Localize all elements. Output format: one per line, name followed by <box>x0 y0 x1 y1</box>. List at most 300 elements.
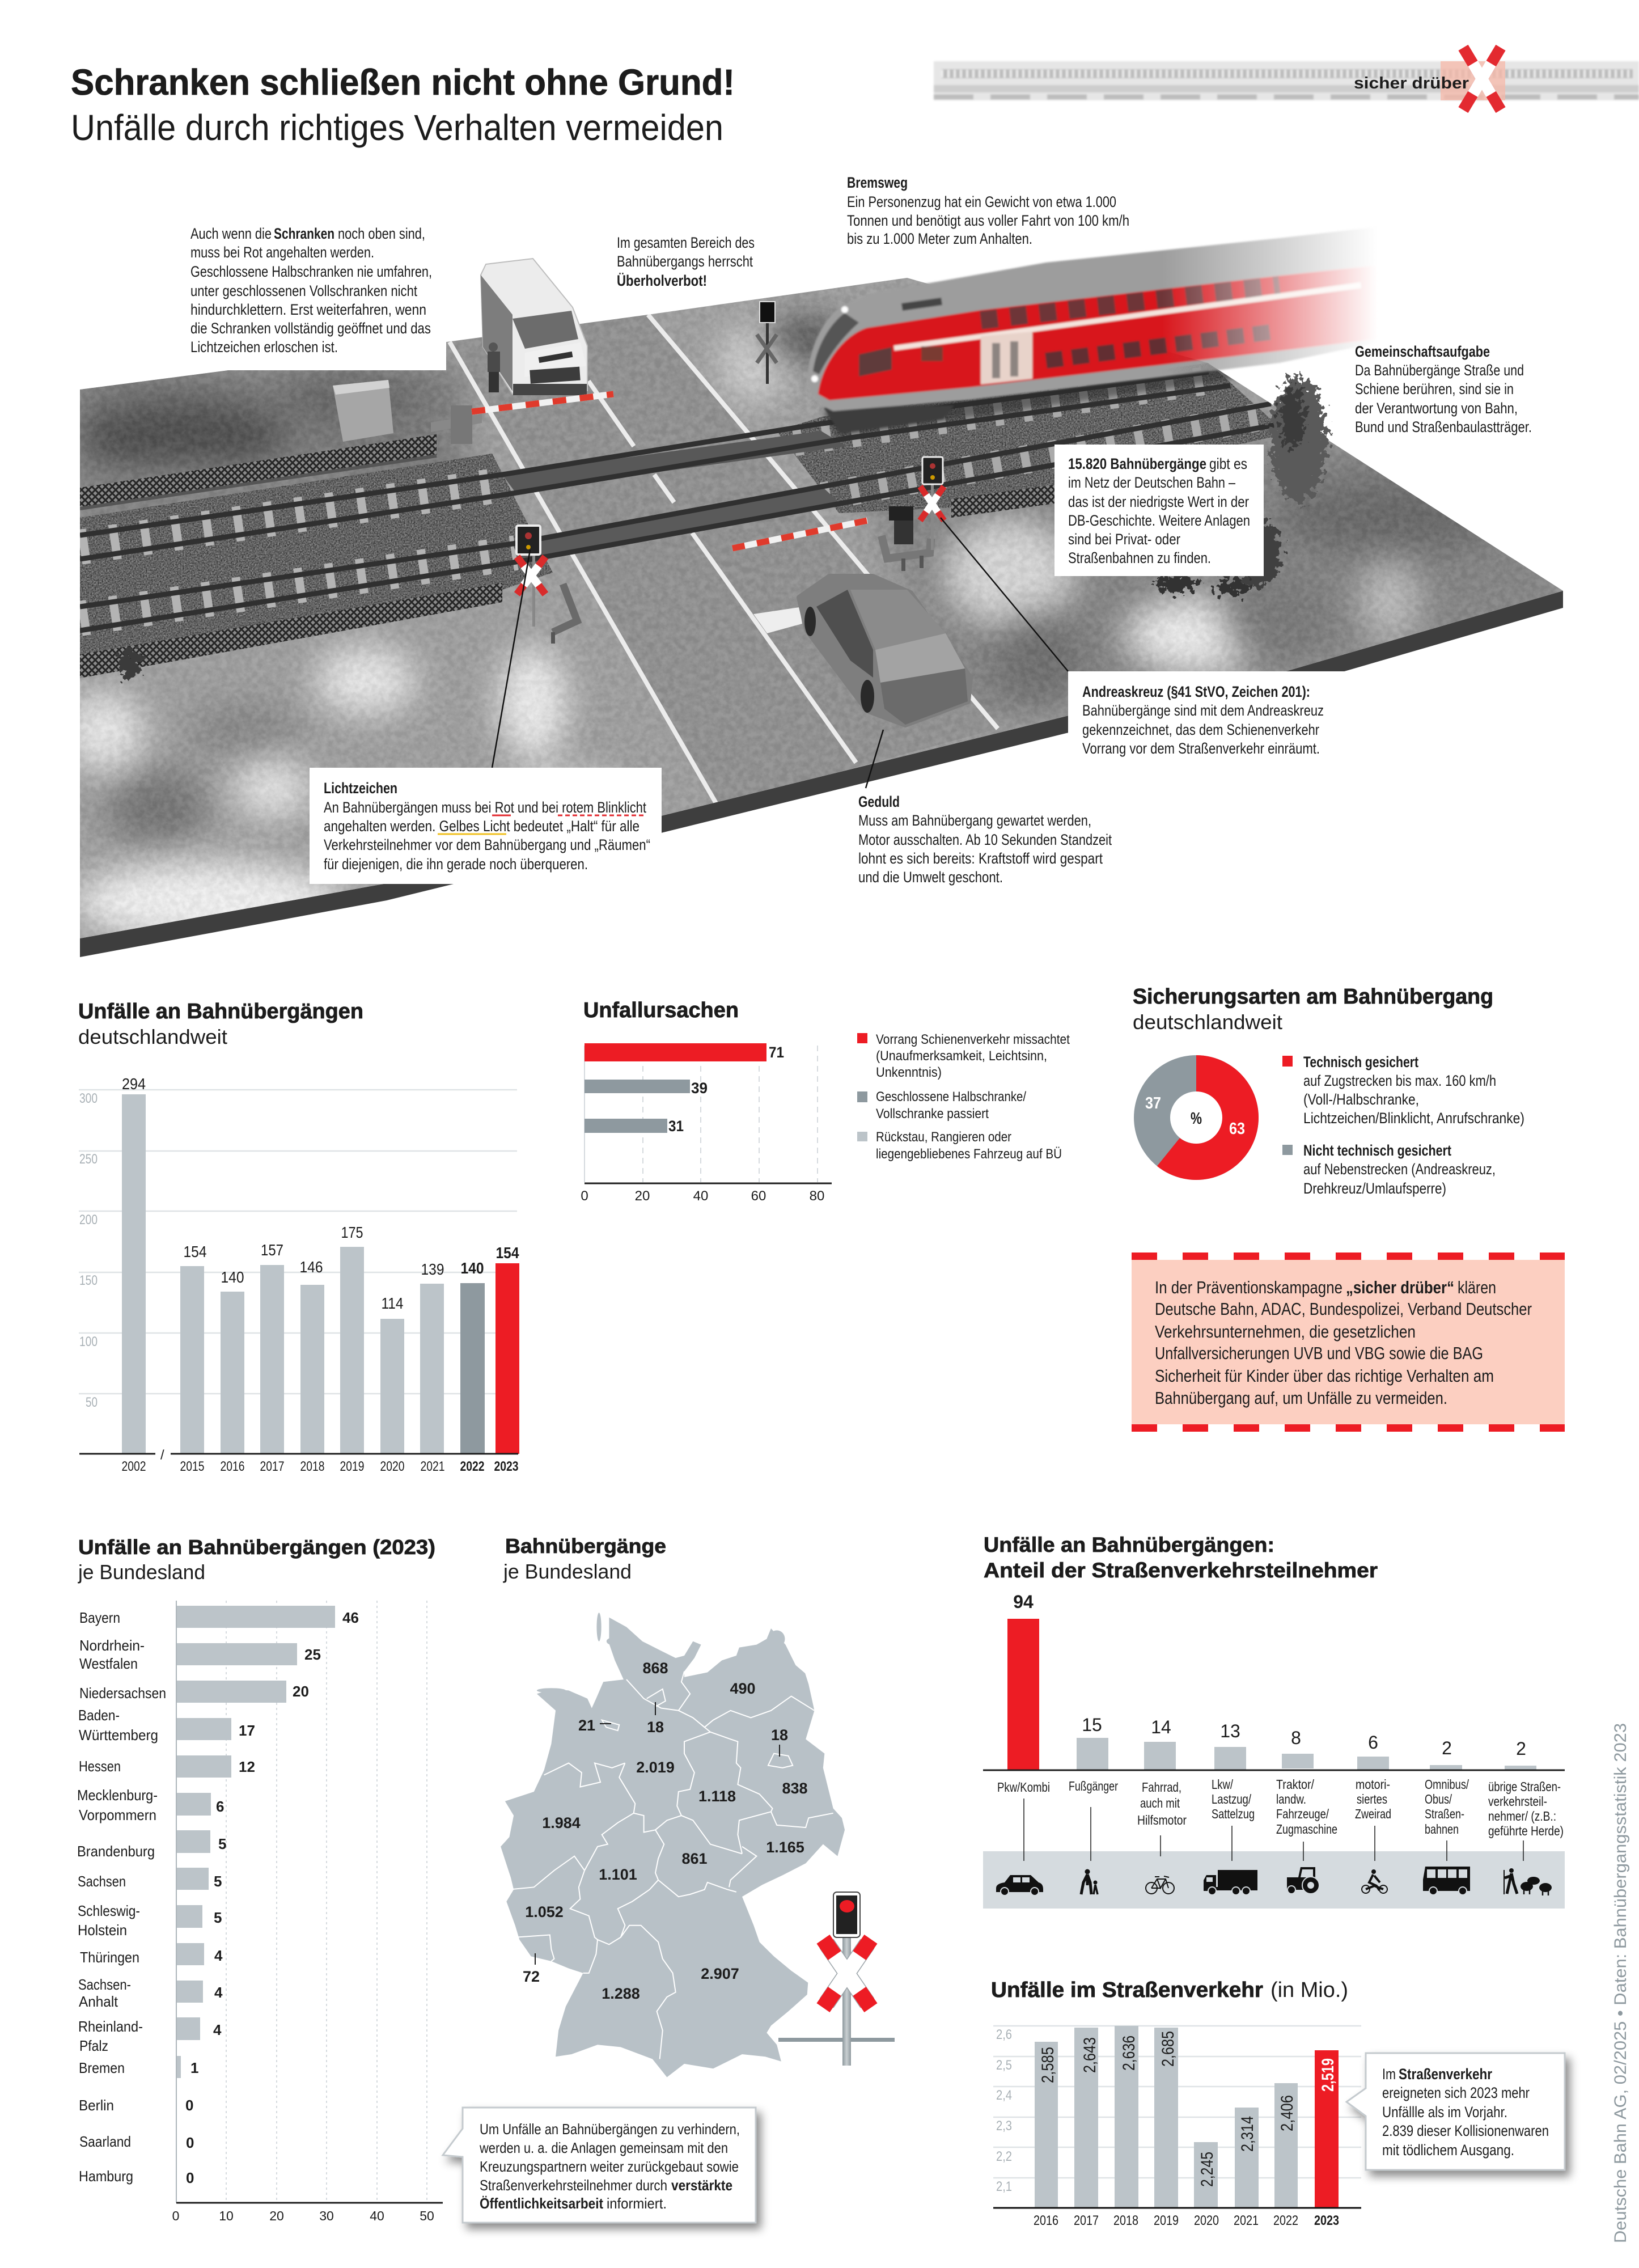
callout: Öffentlichkeitsarbeit: Straßenverkehrsteilnehmer durch <box>480 2177 667 2194</box>
legend: liegengebliebenes Fahrzeug auf BÜ <box>876 1146 1062 1162</box>
rotated bar values: 2,636 <box>1120 2036 1138 2071</box>
callout: Straßenverkehr: mit tödlichem Ausgang. <box>1382 2142 1514 2159</box>
scene side wall <box>80 591 1563 957</box>
x axis labels: 0 <box>172 2208 179 2223</box>
x axis years: 2020 <box>380 1459 405 1474</box>
state labels: Westfalen <box>79 1655 138 1672</box>
heading: Unfälle an Bahnübergängen <box>78 1000 363 1023</box>
callout: 15.820 Bahnübergänge: Straßenbahnen zu finden. <box>1068 549 1211 566</box>
state labels: Hessen <box>79 1758 121 1775</box>
x axis labels: 50 <box>420 2208 434 2223</box>
callout: 15.820 Bahnübergänge: das ist der niedrigste Wert in der <box>1068 493 1249 510</box>
text: Geduld: Muss am Bahnübergang gewartet werden, <box>858 812 1091 829</box>
x axis labels: 80 <box>810 1188 824 1204</box>
crossing pads <box>502 431 846 492</box>
callout: Andreaskreuz: Vorrang vor dem Straßenverkehr einräumt. <box>1082 740 1320 757</box>
x axis years: 2002 <box>121 1459 146 1474</box>
map values: 838 <box>782 1780 808 1797</box>
x axis years: 2015 <box>180 1459 204 1474</box>
text: Überholverbot: Bahnübergangs herrscht <box>617 253 753 270</box>
category labels: landw. <box>1276 1792 1306 1806</box>
icon: bicycle <box>1146 1876 1174 1894</box>
chart: Anteil der Straßenverkehrsteilnehmer <box>983 1533 1565 1909</box>
legend: Technisch gesichert <box>1303 1053 1418 1070</box>
category labels: Lkw/ <box>1212 1777 1233 1792</box>
map values: 1.118 <box>698 1788 736 1805</box>
subheading: je Bundesland <box>78 1560 205 1584</box>
bar values <box>1013 1592 1526 1759</box>
heading: Sicherungsarten am Bahnübergang <box>1133 985 1493 1009</box>
text: Schranken: Geschlossene Halbschranken nie umfahren, <box>190 263 432 280</box>
scene: 3D railway crossing <box>65 222 1570 957</box>
chart: Bahnübergänge je Bundesland map <box>501 1534 845 2077</box>
y axis labels: 100 <box>79 1334 98 1349</box>
van <box>481 259 587 395</box>
text: Gemeinschaftsaufgabe: der Verantwortung von Bahn, <box>1355 400 1518 417</box>
x axis years: 2017 <box>1074 2213 1099 2228</box>
callout: Lichtzeichen: Verkehrsteilnehmer vor dem Bahnübergang und „Räumen“ <box>324 836 650 853</box>
category labels: übrige Straßen- <box>1488 1779 1561 1794</box>
x axis labels: 60 <box>751 1188 766 1204</box>
state labels: Hamburg <box>79 2168 133 2185</box>
state labels: Vorpommern <box>79 1806 156 1823</box>
category labels: nehmer/ (z.B.: <box>1488 1809 1556 1823</box>
y axis labels: 2,1 <box>996 2179 1012 2194</box>
title: Schranken schließen nicht ohne Grund! <box>71 62 735 103</box>
icon: tractor <box>1287 1867 1319 1894</box>
bar values: 146 <box>299 1258 323 1276</box>
bar values: 94 <box>1013 1592 1034 1612</box>
callout: Öffentlichkeitsarbeit: werden u. a. die Anlagen gemeinsam mit den <box>479 2139 728 2156</box>
y axis labels: 300 <box>79 1091 98 1106</box>
callout: Öffentlichkeitsarbeit: Kreuzungspartnern weiter zurückgebaut sowie <box>480 2158 739 2175</box>
bars <box>1007 1619 1536 1770</box>
x axis years: 2023 <box>1314 2213 1339 2228</box>
bar values: 8 <box>1291 1728 1301 1748</box>
category labels: geführte Herde) <box>1488 1823 1564 1838</box>
bar values: 20 <box>293 1683 309 1700</box>
bar values: 12 <box>239 1758 255 1775</box>
y axis labels: 2,6 <box>996 2027 1012 2042</box>
logo: sicher drüber: sicher drüber <box>1354 74 1469 92</box>
front left strip shadow <box>80 456 437 509</box>
text: Geduld: und die Umwelt geschont. <box>858 869 1003 886</box>
signal left with St Andrew's cross <box>516 526 577 644</box>
category labels: Zugmaschine <box>1276 1822 1337 1837</box>
callout: Straßenverkehr: 2.839 dieser Kollisionenwaren <box>1382 2122 1549 2139</box>
map values: 1.165 <box>766 1839 804 1856</box>
x axis labels: 40 <box>370 2208 384 2223</box>
category labels: Sattelzug <box>1212 1806 1255 1821</box>
road surface <box>450 315 998 805</box>
bar values: 154 <box>184 1243 206 1260</box>
heading: Unfälle an Bahnübergängen: <box>984 1533 1274 1556</box>
icon: pedestrian <box>1081 1869 1098 1894</box>
bar values: 1 <box>190 2059 198 2076</box>
category labels: motori- <box>1356 1777 1390 1792</box>
panel: campaign box: Deutsche Bahn, ADAC, Bundespolizei, Verband Deutscher <box>1155 1299 1532 1319</box>
leader line: Geduld <box>866 730 883 788</box>
signal right with St Andrew's cross <box>920 457 944 550</box>
panel: campaign box: Verkehrsunternehmen, die gesetzlichen <box>1155 1322 1416 1342</box>
y axis labels <box>996 2027 1012 2194</box>
category labels: auch mit <box>1140 1796 1180 1810</box>
icon: truck <box>1204 1870 1257 1895</box>
ground, road and tracks <box>65 272 1570 953</box>
category labels: Traktor/ <box>1276 1777 1315 1792</box>
x axis years: 2018 <box>1113 2213 1138 2228</box>
state labels: Rheinland- <box>78 2018 143 2035</box>
category labels: Pkw/Kombi <box>997 1780 1050 1795</box>
state labels: Württemberg <box>79 1727 158 1744</box>
state labels: Saarland <box>79 2133 131 2150</box>
callout: Straßenverkehr: ereigneten sich 2023 mehr <box>1382 2084 1530 2101</box>
legend: Unkenntnis) <box>876 1065 942 1080</box>
x axis years: 2017 <box>260 1459 285 1474</box>
callout: Straßenverkehr: Unfällle als im Vorjahr. <box>1382 2104 1507 2121</box>
bar values: 140 <box>221 1268 244 1286</box>
rotated bar values: 2,406 <box>1278 2095 1297 2131</box>
callout: Andreaskreuz: Andreaskreuz (§41 StVO, Zeichen 201): <box>1082 683 1310 700</box>
leader line: Andreaskreuz <box>941 518 1068 671</box>
switch cabinet <box>333 380 393 442</box>
callout: 15.820 Bahnübergänge: gibt es <box>1209 455 1247 472</box>
bar values: 140 <box>460 1259 484 1277</box>
callout: 15.820 Bahnübergänge: sind bei Privat- oder <box>1068 531 1180 548</box>
car <box>799 577 970 725</box>
leader line: Lichtzeichen <box>492 550 530 768</box>
state labels: Holstein <box>78 1922 127 1939</box>
x axis years: 2018 <box>300 1459 324 1474</box>
chart: Unfälle an Bahnübergängen deutschlandweit <box>78 1000 519 1474</box>
panel: campaign box: In der Präventionskampagne <box>1155 1277 1342 1297</box>
bar values: 5 <box>214 1909 222 1926</box>
text: Geduld <box>858 793 1112 886</box>
y axis labels <box>79 1091 98 1410</box>
callout: 15.820 Bahnübergänge: 15.820 Bahnübergänge <box>1068 455 1206 472</box>
text: Gemeinschaftsaufgabe: Gemeinschaftsaufgabe <box>1355 343 1490 360</box>
rotated bar values: 2,519 <box>1319 2058 1337 2092</box>
map values: 1.052 <box>525 1903 564 1920</box>
map values: 868 <box>642 1660 668 1677</box>
bar values: 6 <box>1368 1732 1378 1753</box>
bushes <box>118 377 1327 678</box>
panel: campaign box: Unfallversicherungen UVB und VBG sowie die BAG <box>1155 1343 1483 1363</box>
state labels: Sachsen <box>78 1873 126 1890</box>
bars <box>1035 2026 1339 2208</box>
x axis labels <box>581 1188 824 1204</box>
bar values: 139 <box>421 1260 444 1278</box>
x axis years: 2019 <box>340 1459 364 1474</box>
bars <box>122 1094 519 1454</box>
heading: Unfälle im Straßenverkehr <box>991 1978 1263 2002</box>
x axis years <box>121 1459 518 1474</box>
x axis years: 2016 <box>1034 2213 1058 2228</box>
donut chart <box>1134 1055 1259 1180</box>
logo: sicher drüber <box>934 48 1639 110</box>
text: Bremsweg: bis zu 1.000 Meter zum Anhalten. <box>847 230 1032 247</box>
state labels <box>77 1609 166 2185</box>
subheading: je Bundesland <box>503 1560 632 1583</box>
legend <box>1282 1053 1524 1197</box>
category labels <box>997 1777 1564 1838</box>
map values: 2.907 <box>701 1965 739 1982</box>
text: Bremsweg: Tonnen und benötigt aus voller Fahrt von 100 km/h <box>847 212 1129 229</box>
legend: (Unaufmerksamkeit, Leichtsinn, <box>876 1048 1047 1064</box>
map values: 2.019 <box>636 1759 675 1776</box>
callout: Öffentlichkeitsarbeit: informiert. <box>607 2195 667 2212</box>
state labels: Brandenburg <box>77 1843 155 1860</box>
white cover behind text: Schranken <box>187 170 446 370</box>
rails <box>80 372 1280 631</box>
callout: Andreaskreuz: gekennzeichnet, das dem Schienenverkehr <box>1082 721 1319 738</box>
category labels: Fahrrad, <box>1142 1780 1181 1795</box>
subheading: deutschlandweit <box>78 1025 227 1048</box>
map values: 1.288 <box>602 1985 640 2002</box>
chart: Unfälle an Bahnübergängen deutschlandweit: / <box>160 1448 164 1463</box>
state labels: Berlin <box>79 2097 114 2114</box>
bar values: 15 <box>1082 1715 1102 1735</box>
callout: Lichtzeichen: Lichtzeichen <box>324 780 397 797</box>
state labels: Baden- <box>78 1707 120 1724</box>
x axis labels: 40 <box>693 1188 708 1204</box>
category labels: Obus/ <box>1425 1792 1452 1806</box>
bar values: 294 <box>122 1075 146 1093</box>
category labels: Straßen- <box>1425 1806 1464 1821</box>
text: Schranken: Lichtzeichen erloschen ist. <box>190 338 338 356</box>
text: Geduld: Motor ausschalten. Ab 10 Sekunden Standzeit <box>858 831 1112 848</box>
map values: 490 <box>730 1680 756 1697</box>
white road markings <box>450 315 998 805</box>
text: Schranken: unter geschlossenen Vollschranken nicht <box>190 282 417 299</box>
shadow under train <box>822 363 1247 437</box>
bar values: 175 <box>341 1224 363 1241</box>
bar values: 4 <box>214 1984 223 2001</box>
heading: Unfälle an Bahnübergängen (2023) <box>78 1535 435 1559</box>
x axis years: 2019 <box>1154 2213 1179 2228</box>
x axis labels: 20 <box>635 1188 650 1204</box>
state labels: Pfalz <box>79 2037 108 2054</box>
chart: Sicherungsarten <box>1133 985 1524 1197</box>
icon: bus <box>1423 1867 1470 1895</box>
legend: auf Nebenstrecken (Andreaskreuz, <box>1303 1161 1496 1178</box>
callout: Lichtzeichen: angehalten werden. Gelbes Licht bedeutet „Halt“ für alle <box>324 818 639 835</box>
map values: 1.101 <box>599 1866 637 1883</box>
icon: car <box>996 1875 1043 1895</box>
text: Schranken <box>190 225 432 356</box>
rotated bar values <box>1039 2031 1337 2187</box>
text: Bremsweg <box>847 174 1129 247</box>
bar values: 39 <box>691 1080 708 1097</box>
text: Gemeinschaftsaufgabe <box>1355 343 1532 435</box>
text: Schranken: Auch wenn die <box>190 225 272 242</box>
text: Schranken: muss bei Rot angehalten werden. <box>190 244 374 261</box>
callout: Straßenverkehr: Straßenverkehr <box>1399 2066 1492 2083</box>
panel: campaign box: „sicher drüber“ <box>1346 1277 1454 1297</box>
legend: Geschlossene Halbschranke/ <box>876 1089 1026 1105</box>
state labels: Thüringen <box>80 1949 139 1966</box>
barrier back <box>431 394 613 444</box>
bar values: 0 <box>186 2134 194 2151</box>
callout: 15.820 Bahnübergänge: DB-Geschichte. Weitere Anlagen <box>1068 512 1250 529</box>
heading <box>984 1533 1378 1582</box>
panel: campaign box: Bahnübergang auf, um Unfälle zu vermeiden. <box>1155 1388 1447 1408</box>
x axis years: 2016 <box>220 1459 245 1474</box>
category labels: Lastzug/ <box>1212 1792 1251 1806</box>
map values: 21 <box>578 1717 595 1734</box>
panel: campaign box: klären <box>1458 1277 1496 1297</box>
category labels: verkehrsteil- <box>1488 1794 1547 1809</box>
text: Gemeinschaftsaufgabe: Schiene berühren, sind sie in <box>1355 380 1514 397</box>
title <box>71 62 735 148</box>
category labels: Zweirad <box>1355 1806 1391 1821</box>
legend: Rückstau, Rangieren oder <box>876 1129 1011 1145</box>
y axis labels: 150 <box>79 1273 98 1288</box>
x axis labels: 10 <box>219 2208 234 2223</box>
chart: Unfallursachen <box>581 998 1070 1204</box>
bar values: 4 <box>214 1947 223 1964</box>
x axis years: 2021 <box>1234 2213 1259 2228</box>
bar values: 31 <box>668 1118 684 1135</box>
train <box>807 222 1417 433</box>
icon: shepherd with sheep <box>1504 1868 1552 1895</box>
x axis years: 2020 <box>1194 2213 1219 2228</box>
map values: 72 <box>523 1968 540 1985</box>
subtitle: Unfälle durch richtiges Verhalten vermeiden <box>71 107 723 148</box>
source note: Deutsche Bahn AG, 02/2025 • Daten: Bahnübergangsstatistik 2023 <box>1611 1723 1630 2243</box>
subheading: deutschlandweit <box>1133 1010 1282 1034</box>
text: Geduld: lohnt es sich bereits: Kraftstoff wird gespart <box>858 850 1103 867</box>
state labels: Nordrhein- <box>79 1637 145 1654</box>
map of Germany <box>501 1613 845 2077</box>
icon: motorcycle <box>1362 1869 1387 1893</box>
heading: Bahnübergänge <box>505 1534 666 1558</box>
category labels: Fußgänger <box>1069 1779 1118 1793</box>
callout: 15.820 Bahnübergänge: im Netz der Deutschen Bahn – <box>1068 474 1235 491</box>
ballast <box>80 363 1278 654</box>
legend: auf Zugstrecken bis max. 160 km/h <box>1303 1072 1496 1089</box>
category labels: bahnen <box>1425 1822 1459 1837</box>
map values <box>523 1660 808 2002</box>
callout: Straßenverkehr <box>1346 2053 1565 2170</box>
callout: Straßenverkehr: Im <box>1382 2066 1396 2083</box>
bar values: 114 <box>381 1294 404 1312</box>
panel: campaign box: Sicherheit für Kinder über das richtige Verhalten am <box>1155 1366 1494 1386</box>
donut chart: % <box>1191 1110 1202 1128</box>
chart: Unfälle je Bundesland <box>77 1535 443 2223</box>
y axis labels: 2,3 <box>996 2118 1012 2134</box>
state labels: Mecklenburg- <box>77 1787 158 1804</box>
icon band <box>983 1851 1565 1909</box>
x axis years: 2023 <box>494 1459 518 1474</box>
y axis labels: 50 <box>86 1395 98 1410</box>
legend: Nicht technisch gesichert <box>1303 1142 1451 1159</box>
x axis years: 2022 <box>460 1459 484 1474</box>
state labels: Sachsen- <box>78 1976 131 1993</box>
text: Überholverbot: Im gesamten Bereich des <box>617 234 755 251</box>
text: Schranken: noch oben sind, <box>338 225 425 242</box>
map values: 1.984 <box>542 1814 581 1831</box>
bars <box>585 1043 766 1133</box>
bar values: 4 <box>213 2021 222 2038</box>
callout: 15.820 Bahnübergänge <box>1054 445 1264 576</box>
bar values: 157 <box>261 1241 283 1259</box>
text: Bremsweg: Bremsweg <box>847 174 908 191</box>
map values: 861 <box>681 1850 708 1867</box>
x axis years: 2022 <box>1273 2213 1298 2228</box>
state labels: Bayern <box>79 1609 120 1626</box>
y axis labels: 2,4 <box>996 2088 1012 2103</box>
donut chart: 37 <box>1145 1094 1161 1112</box>
bar values: 14 <box>1151 1717 1171 1737</box>
callout: Lichtzeichen: An Bahnübergängen muss bei Rot und bei rotem Blinklicht <box>324 799 646 816</box>
x axis labels: 0 <box>581 1188 588 1204</box>
x axis labels: 20 <box>269 2208 284 2223</box>
callout: Andreaskreuz: Bahnübergänge sind mit dem Andreaskreuz <box>1082 702 1324 719</box>
bar values: 2 <box>1516 1738 1526 1759</box>
category labels: Omnibus/ <box>1425 1777 1469 1792</box>
y axis labels: 200 <box>79 1212 98 1228</box>
callout: Lichtzeichen: für diejenigen, die ihn gerade noch überqueren. <box>324 856 588 873</box>
bar values: 5 <box>218 1835 226 1852</box>
bar values <box>185 1609 359 2186</box>
callout: Öffentlichkeitsarbeit: Öffentlichkeitsarbeit <box>480 2195 603 2212</box>
bar values: 6 <box>216 1798 224 1815</box>
text: Schranken: die Schranken vollständig geöffnet und das <box>190 320 431 337</box>
y axis labels: 2,5 <box>996 2058 1012 2073</box>
legend: Drehkreuz/Umlaufsperre) <box>1303 1180 1446 1197</box>
text: Schranken: hindurchklettern. Erst weiterfahren, wenn <box>190 301 426 318</box>
legend: Lichtzeichen/Blinklicht, Anrufschranke) <box>1303 1110 1524 1127</box>
rotated bar values: 2,585 <box>1039 2047 1057 2083</box>
callout: Andreaskreuz <box>1068 671 1363 773</box>
text: Bremsweg: Ein Personenzug hat ein Gewicht von etwa 1.000 <box>847 193 1116 210</box>
x axis years <box>1034 2213 1339 2228</box>
bar values: 25 <box>304 1646 321 1663</box>
map tick lines <box>535 1702 780 1965</box>
legend <box>857 1032 1070 1162</box>
bars <box>176 1606 335 2078</box>
rotated bar values: 2,314 <box>1238 2116 1257 2152</box>
chart: Unfälle im Straßenverkehr <box>991 1978 1361 2228</box>
bar values: 13 <box>1220 1721 1240 1741</box>
category labels: Fahrzeuge/ <box>1276 1806 1329 1821</box>
rotated bar values: 2,685 <box>1159 2031 1178 2067</box>
cyclist <box>488 342 500 392</box>
rotated bar values: 2,643 <box>1081 2037 1099 2073</box>
category labels: Hilfsmotor <box>1137 1813 1187 1827</box>
x axis labels: 30 <box>319 2208 334 2223</box>
callout: Öffentlichkeitsarbeit <box>443 2108 756 2223</box>
legend: Vollschranke passiert <box>876 1106 989 1122</box>
state labels: Niedersachsen <box>79 1685 166 1702</box>
bar values: 154 <box>495 1244 519 1262</box>
text: Überholverbot: Überholverbot! <box>617 272 707 289</box>
bar values: 17 <box>239 1722 255 1739</box>
icon: crossing signal with St Andrew's cross <box>778 1892 895 2066</box>
text: Schranken: Schranken <box>274 225 334 242</box>
bar values: 46 <box>342 1609 359 1626</box>
heading: (in Mio.) <box>1270 1978 1348 2002</box>
text: Geduld: Geduld <box>858 793 900 810</box>
bar values: 5 <box>214 1873 222 1890</box>
bar values: 0 <box>185 2097 193 2114</box>
state labels: Bremen <box>79 2059 125 2076</box>
front barrier <box>732 506 931 571</box>
legend: Vorrang Schienenverkehr missachtet <box>876 1032 1070 1047</box>
bar values <box>122 1075 519 1312</box>
y axis labels: 250 <box>79 1152 98 1167</box>
